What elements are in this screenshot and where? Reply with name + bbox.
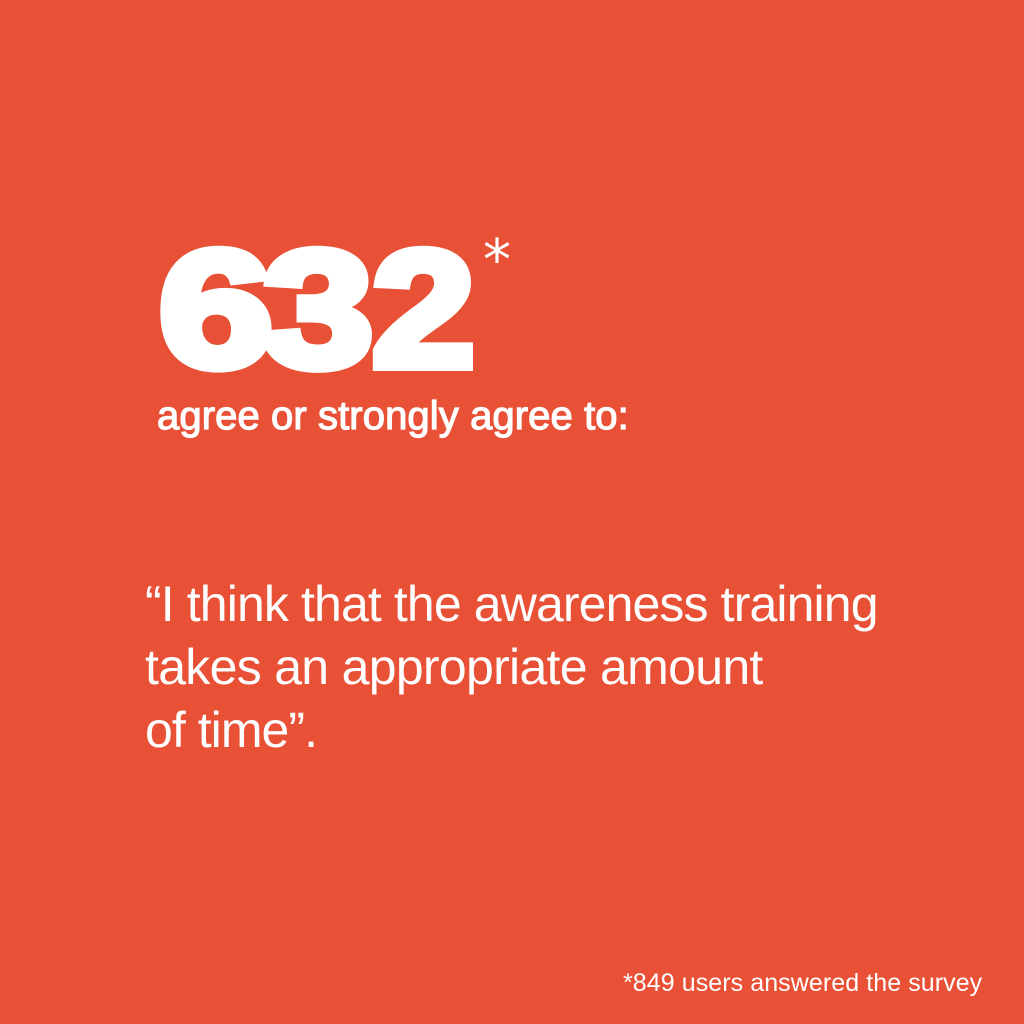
big number: 632: 3 <box>263 217 373 401</box>
big number: 632: 6 <box>159 218 273 402</box>
quote text: “I think that the awareness training <box>145 576 878 632</box>
quote text <box>145 576 878 758</box>
asterisk: * <box>483 228 511 293</box>
big number: 632 <box>159 217 475 402</box>
big number: 632: 2 <box>372 217 475 402</box>
quote text: takes an appropriate amount <box>145 639 763 695</box>
footnote: *849 users answered the survey <box>623 969 982 997</box>
subheading: agree or strongly agree to: <box>157 394 629 438</box>
quote text: of time”. <box>145 702 317 758</box>
